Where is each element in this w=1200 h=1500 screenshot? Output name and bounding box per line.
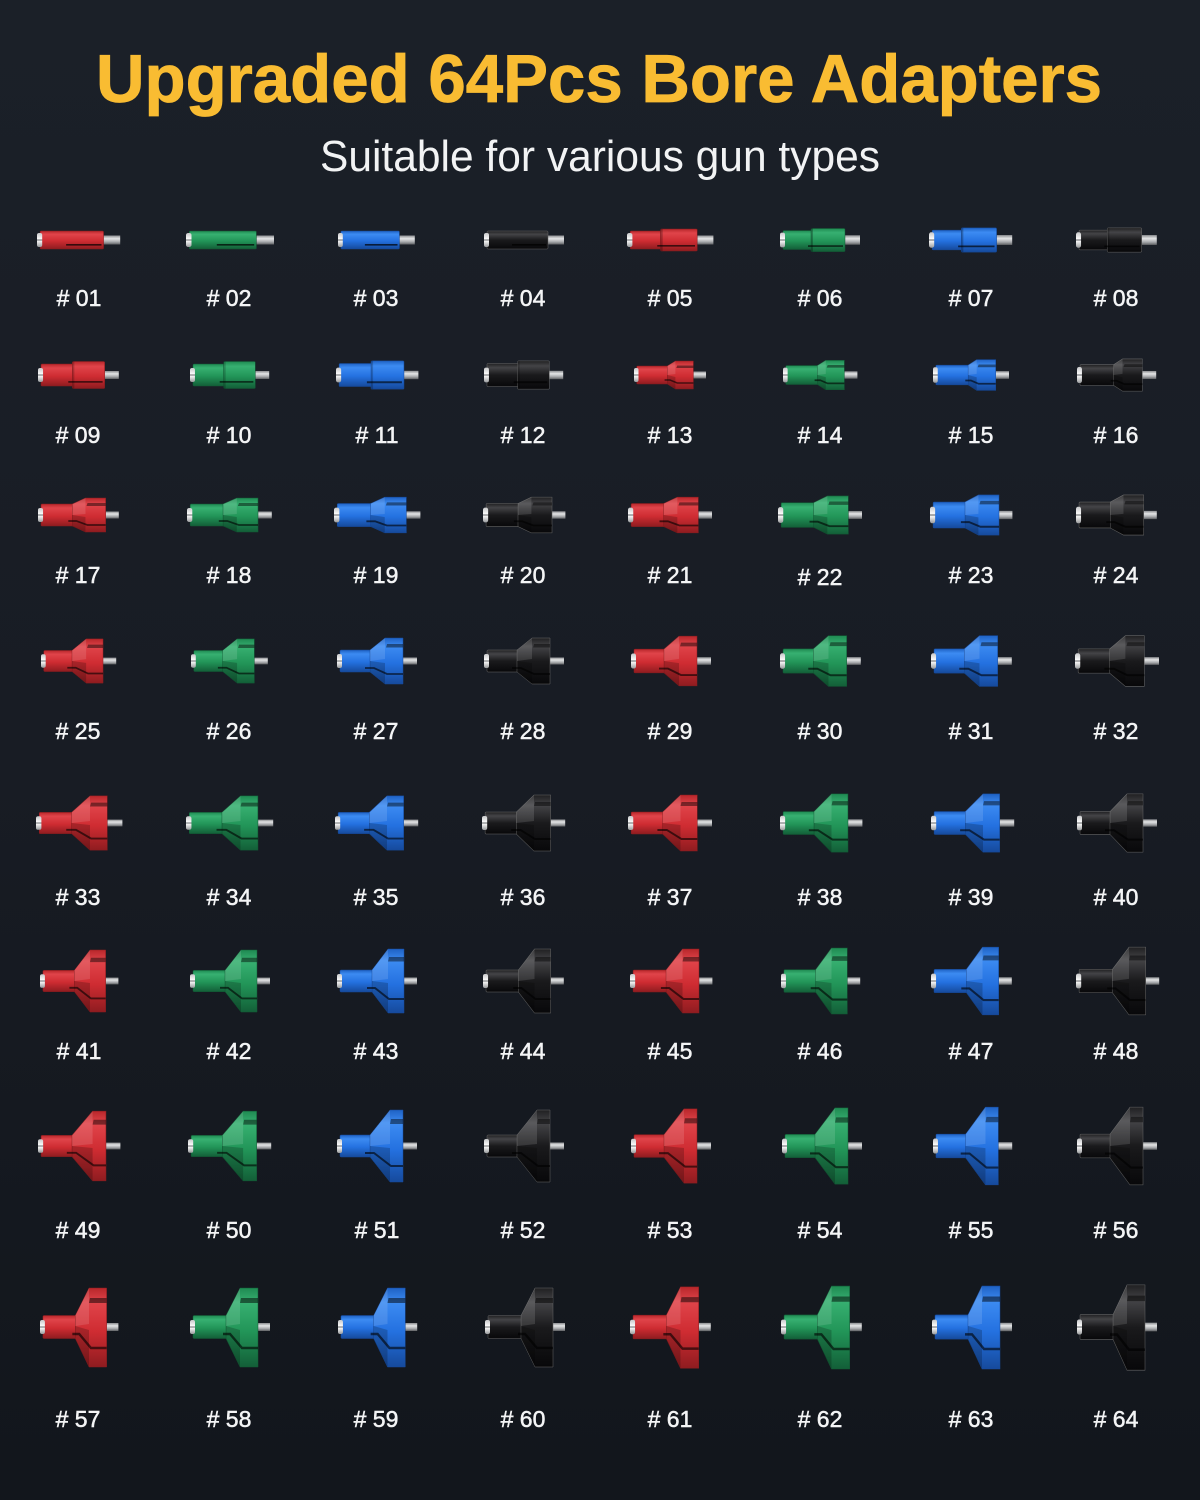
adapter #12 xyxy=(484,361,563,448)
adapter #04: # 04 xyxy=(501,285,546,311)
subtitle: Suitable for various gun types xyxy=(320,132,880,181)
adapter #58 xyxy=(190,1288,270,1432)
adapter #56 xyxy=(1077,1107,1157,1243)
adapter #59: # 59 xyxy=(354,1406,398,1432)
adapter #52 xyxy=(484,1110,564,1243)
adapter #22 xyxy=(778,496,862,590)
adapter #25 xyxy=(41,639,116,744)
adapter #63: # 63 xyxy=(949,1406,993,1432)
adapter #35 xyxy=(335,796,418,910)
adapter #47 xyxy=(931,947,1012,1064)
adapter #23 xyxy=(930,495,1012,588)
adapter #61 xyxy=(630,1287,711,1432)
adapter #14 xyxy=(783,360,857,448)
adapter #14: # 14 xyxy=(798,422,843,448)
adapter #42 xyxy=(190,950,270,1064)
adapter #19 xyxy=(334,497,420,588)
adapter #58: # 58 xyxy=(207,1406,251,1432)
adapter #40: # 40 xyxy=(1094,884,1138,910)
adapter #06 xyxy=(780,228,860,311)
adapter #08 xyxy=(1076,228,1157,311)
adapter #35: # 35 xyxy=(354,884,398,910)
adapter #41 xyxy=(40,950,118,1064)
adapter #31: # 31 xyxy=(949,718,993,744)
adapter #08: # 08 xyxy=(1094,285,1138,311)
adapter #44: # 44 xyxy=(501,1038,546,1064)
adapter #38: # 38 xyxy=(798,884,842,910)
adapter #38 xyxy=(780,794,862,910)
adapter #52: # 52 xyxy=(501,1217,545,1243)
adapter #49 xyxy=(38,1111,120,1243)
adapter #57: # 57 xyxy=(56,1406,100,1432)
adapter #30: # 30 xyxy=(798,718,842,744)
adapter #05: # 05 xyxy=(648,285,692,311)
adapter #15: # 15 xyxy=(949,422,993,448)
adapter #37 xyxy=(628,795,712,910)
adapter #53 xyxy=(631,1109,711,1243)
adapter #36: # 36 xyxy=(501,884,545,910)
adapter #49: # 49 xyxy=(56,1217,100,1243)
adapter #25: # 25 xyxy=(56,718,100,744)
adapter #55: # 55 xyxy=(949,1217,993,1243)
adapter #45 xyxy=(630,949,712,1064)
adapter #20: # 20 xyxy=(501,562,545,588)
adapter #11 xyxy=(336,361,418,448)
adapter #16 xyxy=(1077,359,1156,448)
adapter #30 xyxy=(780,636,861,744)
adapter #07 xyxy=(929,228,1012,311)
adapter #28: # 28 xyxy=(501,718,545,744)
adapter #62 xyxy=(781,1286,862,1432)
adapter #26: # 26 xyxy=(207,718,251,744)
adapter #33 xyxy=(36,796,122,910)
adapter #22: # 22 xyxy=(798,564,842,590)
adapter #48: # 48 xyxy=(1094,1038,1138,1064)
adapter #18: # 18 xyxy=(207,562,251,588)
adapter #04 xyxy=(484,231,564,311)
adapter #36 xyxy=(482,795,565,910)
adapter #17 xyxy=(38,498,119,588)
adapter #41: # 41 xyxy=(57,1038,101,1064)
adapter #39 xyxy=(931,794,1014,910)
adapter #55 xyxy=(933,1107,1012,1243)
adapter #46 xyxy=(781,948,860,1064)
adapter #37: # 37 xyxy=(648,884,692,910)
adapter #63 xyxy=(932,1286,1012,1432)
adapter #15 xyxy=(933,360,1009,448)
adapter #28 xyxy=(484,638,564,744)
adapter #29 xyxy=(631,636,711,744)
adapter #32 xyxy=(1075,636,1159,744)
adapter #13 xyxy=(634,361,706,448)
adapter #34: # 34 xyxy=(207,884,252,910)
adapter #17: # 17 xyxy=(56,562,100,588)
adapter #01: # 01 xyxy=(57,285,101,311)
adapter #01 xyxy=(37,231,120,311)
adapter #24: # 24 xyxy=(1094,562,1139,588)
adapter #05 xyxy=(627,229,713,311)
adapter #44 xyxy=(483,949,564,1064)
adapter #60: # 60 xyxy=(501,1406,545,1432)
adapter #33: # 33 xyxy=(56,884,100,910)
adapter #12: # 12 xyxy=(501,422,545,448)
adapter #46: # 46 xyxy=(798,1038,842,1064)
adapter #11: # 11 xyxy=(355,422,399,448)
adapter #03: # 03 xyxy=(354,285,398,311)
adapter #32: # 32 xyxy=(1094,718,1138,744)
adapter #59 xyxy=(338,1288,417,1432)
adapter #51 xyxy=(337,1110,417,1243)
adapter #23: # 23 xyxy=(949,562,993,588)
adapter #43: # 43 xyxy=(354,1038,398,1064)
adapter #50 xyxy=(188,1111,271,1243)
adapter #24 xyxy=(1076,495,1157,588)
adapter #09 xyxy=(38,362,119,448)
adapter #40 xyxy=(1077,794,1157,910)
adapter #13: # 13 xyxy=(648,422,692,448)
adapter #53: # 53 xyxy=(648,1217,692,1243)
adapter #31 xyxy=(931,636,1012,744)
adapter #19: # 19 xyxy=(354,562,398,588)
adapter #10: # 10 xyxy=(207,422,251,448)
adapter #43 xyxy=(337,949,417,1064)
adapter #29: # 29 xyxy=(648,718,692,744)
adapter #16: # 16 xyxy=(1094,422,1138,448)
adapter #45: # 45 xyxy=(648,1038,692,1064)
adapter #27 xyxy=(337,638,417,744)
adapter #26 xyxy=(191,639,268,744)
adapter #27: # 27 xyxy=(354,718,398,744)
adapter grid xyxy=(36,228,1159,1432)
title: Upgraded 64Pcs Bore Adapters xyxy=(96,41,1102,117)
adapter #21: # 21 xyxy=(648,562,692,588)
adapter #56: # 56 xyxy=(1094,1217,1138,1243)
adapter #21 xyxy=(628,497,712,588)
adapter #20 xyxy=(483,497,565,588)
adapter #02 xyxy=(186,231,274,311)
adapter #34 xyxy=(186,796,273,910)
adapter #03 xyxy=(338,231,415,311)
adapter #60 xyxy=(485,1288,565,1432)
adapter #64: # 64 xyxy=(1094,1406,1139,1432)
adapter #18 xyxy=(187,498,272,588)
adapter #07: # 07 xyxy=(949,285,993,311)
adapter #47: # 47 xyxy=(949,1038,993,1064)
adapter #06: # 06 xyxy=(798,285,842,311)
adapter #54 xyxy=(782,1108,862,1243)
adapter #61: # 61 xyxy=(648,1406,692,1432)
adapter #51: # 51 xyxy=(355,1217,399,1243)
adapter #42: # 42 xyxy=(207,1038,251,1064)
adapter #54: # 54 xyxy=(798,1217,843,1243)
adapter #48 xyxy=(1076,947,1159,1064)
adapter #09: # 09 xyxy=(56,422,100,448)
adapter #64 xyxy=(1077,1285,1157,1432)
adapter #57 xyxy=(40,1288,118,1432)
adapter #39: # 39 xyxy=(949,884,993,910)
adapter #10 xyxy=(190,362,269,448)
adapter #50: # 50 xyxy=(207,1217,251,1243)
adapter #02: # 02 xyxy=(207,285,251,311)
adapter #62: # 62 xyxy=(798,1406,842,1432)
